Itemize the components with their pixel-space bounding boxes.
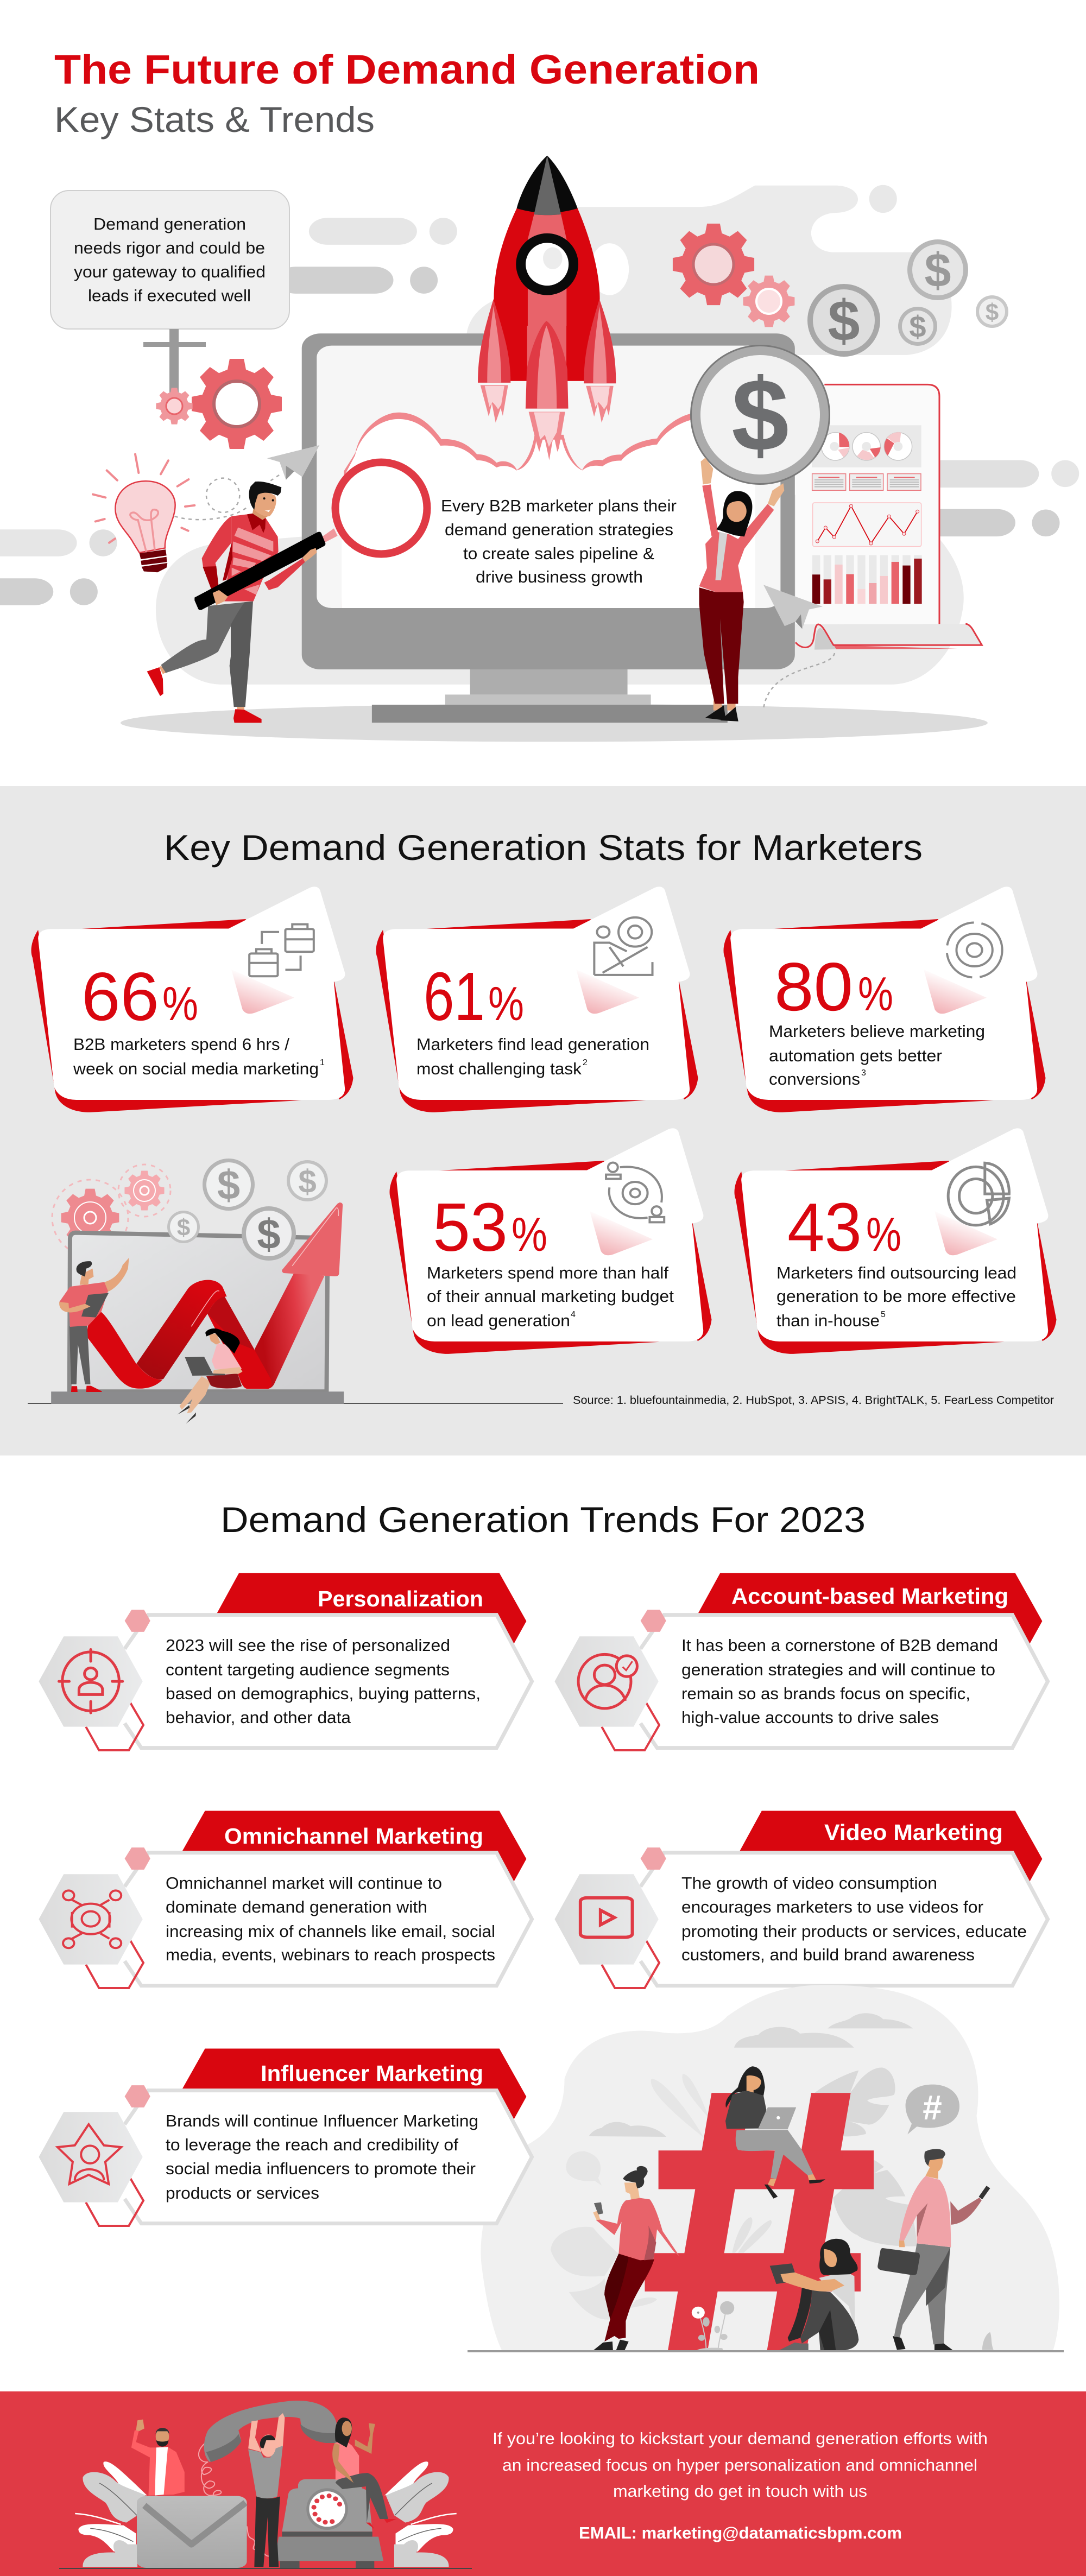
red zigzag arrow <box>87 1202 343 1389</box>
illustration: phone and envelope <box>59 2401 472 2568</box>
stat card: 80%: 80 <box>774 948 853 1025</box>
cta text <box>493 2429 988 2542</box>
trend card: omnichannel marketing: Omnichannel Marketing <box>224 1824 483 1849</box>
center text: Every B2B marketer plans their <box>441 496 677 515</box>
seated woman with laptop <box>178 1328 242 1423</box>
stat card: 43%: 43 <box>787 1189 862 1265</box>
trend card: personalization: based on demographics, buying patterns, <box>166 1684 481 1703</box>
icon: top gears <box>673 224 794 327</box>
trend card: influencer marketing: Brands will continue Influencer Marketing <box>166 2111 478 2130</box>
icon: pink gears <box>52 1164 171 1256</box>
icon: coins: $ <box>177 1214 190 1241</box>
background leaves <box>551 2067 994 2350</box>
trend card: account-based marketing: generation strategies and will continue to <box>681 1660 995 1679</box>
handset <box>204 2401 337 2462</box>
stat card: 61%: Marketers find lead generation <box>416 1035 649 1054</box>
center text: to create sales pipeline & <box>463 544 654 563</box>
trend card: account-based marketing: high-value accounts to drive sales <box>681 1708 939 1727</box>
trend card: omnichannel marketing: increasing mix of channels like email, social <box>166 1922 495 1941</box>
stat card: 80%: % <box>858 967 893 1021</box>
center text: drive business growth <box>476 567 643 586</box>
panel: key stats section <box>0 786 1086 1455</box>
trend card: personalization: behavior, and other data <box>166 1708 351 1727</box>
leaves right <box>384 2461 457 2567</box>
trend card: influencer marketing: to leverage the reach and credibility of <box>166 2135 458 2154</box>
icon: left gears <box>156 359 282 449</box>
cta text: EMAIL: marketing@datamaticsbpm.com <box>579 2523 902 2542</box>
laptop frame <box>51 1233 344 1404</box>
stat card: 61% <box>376 887 698 1112</box>
person: left man <box>131 2420 185 2496</box>
icon: dollar pie chart <box>948 1163 1009 1225</box>
trend card: account-based marketing: Account-based Marketing <box>731 1584 1008 1609</box>
cta text: If you’re looking to kickstart your demand generation efforts with <box>493 2429 988 2448</box>
trend card: account-based marketing <box>554 1573 1048 1750</box>
telephone base <box>275 2479 383 2568</box>
trend card: personalization: 2023 will see the rise of personalized <box>166 1636 450 1655</box>
trend card: video marketing: promoting their products or services, educate <box>681 1922 1027 1941</box>
icon: big dollar coin: $ <box>731 358 789 473</box>
trend card: personalization: content targeting audience segments <box>166 1660 450 1679</box>
man with magnifier <box>147 482 325 723</box>
trend card: personalization: Personalization <box>318 1586 483 1611</box>
trend card: influencer marketing: products or services <box>166 2183 319 2202</box>
illustration: growth arrow with laptop <box>28 1159 1054 1423</box>
stat card: 80%: automation gets better <box>769 1046 942 1065</box>
flower plants <box>692 2301 734 2351</box>
stat card: 43%: 5 <box>881 1310 886 1319</box>
icon: paper planes <box>267 445 835 711</box>
icon: coins: $ <box>909 309 926 344</box>
icon: lightbulb <box>93 454 280 572</box>
trend card: influencer marketing: social media influencers to promote their <box>166 2159 476 2178</box>
illustration: hashtag community <box>468 1985 1064 2352</box>
stat card: 53%: of their annual marketing budget <box>427 1287 674 1306</box>
speech bubble with hash: # <box>923 2088 942 2127</box>
trend card: omnichannel marketing: dominate demand generation with <box>166 1897 427 1916</box>
woman holding coin <box>699 458 784 721</box>
source note: Source: 1. bluefountainmedia, 2. HubSpot, 3. APSIS, 4. BrightTALK, 5. FearLess Competitor <box>573 1394 1054 1407</box>
stat card: 43%: than in-house <box>776 1311 880 1330</box>
telephone cord <box>199 2443 269 2556</box>
panel: trends section <box>39 1499 1064 2352</box>
person: seated woman <box>332 2417 396 2529</box>
stat card: 43%: Marketers find outsourcing lead <box>776 1263 1016 1282</box>
stat card: 53% <box>389 1128 712 1354</box>
icon: coins: $ <box>298 1163 317 1200</box>
center text <box>441 496 677 586</box>
icon: report panel <box>795 384 982 650</box>
subtitle: Key Stats & Trends <box>54 99 375 140</box>
cta text: marketing do get in touch with us <box>613 2482 867 2501</box>
icon: coins <box>167 1159 328 1261</box>
callout box: needs rigor and could be <box>74 238 265 257</box>
trend card: influencer marketing: Influencer Marketing <box>261 2061 483 2086</box>
rocket <box>478 156 616 460</box>
man with tablet <box>59 1258 129 1392</box>
background blob and clouds <box>481 1985 1059 2351</box>
stat card: 61%: % <box>488 977 524 1030</box>
stat card: 80%: Marketers believe marketing <box>769 1022 985 1041</box>
trend card: account-based marketing: It has been a cornerstone of B2B demand <box>681 1636 998 1655</box>
icon: coins: $ <box>217 1162 240 1208</box>
background blobs and pills <box>0 185 1079 742</box>
stat card: 53%: Marketers spend more than half <box>427 1263 668 1282</box>
woman on top with laptop <box>725 2066 825 2199</box>
stat card: 61%: 61 <box>424 958 485 1035</box>
stat card: 53%: 53 <box>433 1189 508 1265</box>
trend card: account-based marketing: remain so as brands focus on specific, <box>681 1684 970 1703</box>
icon: people and gear <box>606 1162 664 1222</box>
title: The Future of Demand Generation <box>54 47 760 93</box>
icon: play button <box>580 1898 633 1937</box>
icon: gear with arrows <box>947 922 1002 978</box>
icon: coins: $ <box>257 1210 281 1258</box>
trend card: video marketing: The growth of video consumption <box>681 1874 937 1893</box>
standing woman with phone <box>593 2166 680 2351</box>
callout box: leads if executed well <box>88 286 251 305</box>
cta text: an increased focus on hyper personalization and omnichannel <box>502 2455 977 2474</box>
callout box <box>50 191 289 329</box>
walking man with bag <box>877 2149 990 2351</box>
stat card: 66%: % <box>162 977 198 1030</box>
trend card: video marketing: Video Marketing <box>824 1820 1003 1845</box>
icon: coins: $ <box>986 299 999 326</box>
magnifying glass <box>322 463 427 554</box>
stat card: 43% <box>734 1128 1057 1354</box>
monitor <box>302 333 795 723</box>
stat card: 66%: 1 <box>320 1058 325 1067</box>
stat card: 66%: B2B marketers spend 6 hrs / <box>73 1035 289 1054</box>
stat card: 53%: 4 <box>571 1310 576 1319</box>
trend card: omnichannel marketing <box>39 1811 532 1988</box>
icon: coins <box>807 239 1008 357</box>
speech bubble with hash <box>906 2085 959 2135</box>
trend card: video marketing <box>554 1811 1048 1988</box>
seated woman with tablet <box>770 2239 858 2351</box>
person: middle man <box>248 2413 285 2567</box>
trend card: personalization <box>39 1573 532 1750</box>
stat card: 53%: % <box>512 1207 547 1261</box>
stat card: 43%: % <box>866 1207 901 1261</box>
center text: demand generation strategies <box>445 520 673 539</box>
stat card: 61%: most challenging task <box>416 1059 582 1078</box>
stat card: 80%: conversions <box>769 1069 860 1088</box>
icon: gear network <box>63 1890 121 1948</box>
section heading: key stats: Key Demand Generation Stats for Marketers <box>164 827 923 868</box>
trend card: video marketing: customers, and build brand awareness <box>681 1945 975 1964</box>
callout box: your gateway to qualified <box>74 262 266 281</box>
leaves left <box>75 2461 147 2567</box>
trend card: influencer marketing <box>39 2048 532 2226</box>
icon: coins: $ <box>828 289 860 353</box>
icon: star person <box>58 2124 121 2184</box>
hashtag symbol <box>645 2093 874 2351</box>
envelope <box>137 2496 247 2568</box>
stat card: 80%: 3 <box>861 1068 866 1078</box>
panel: call to action <box>0 2391 1086 2576</box>
callout box: Demand generation <box>93 214 246 233</box>
trend card: video marketing: encourages marketers to use videos for <box>681 1897 983 1916</box>
stat card: 66%: 66 <box>81 958 159 1035</box>
trend card: omnichannel marketing: media, events, webinars to reach prospects <box>166 1945 495 1964</box>
signpost <box>143 329 206 394</box>
icon: verified user <box>578 1654 637 1708</box>
icon: big dollar coin <box>690 345 830 485</box>
icon: climbing person and gear <box>594 917 653 975</box>
panel: hero section <box>0 47 1079 742</box>
section heading: trends: Demand Generation Trends For 2023 <box>220 1499 866 1540</box>
icon: coins: $ <box>925 243 951 297</box>
icon: briefcases <box>249 925 314 976</box>
trend card: omnichannel marketing: Omnichannel market will continue to <box>166 1874 442 1893</box>
icon: target person <box>59 1649 123 1713</box>
stat card: 80% <box>723 887 1046 1112</box>
stat card: 53%: on lead generation <box>427 1311 570 1330</box>
stat card: 61%: 2 <box>583 1058 588 1067</box>
stat card: 66%: week on social media marketing <box>73 1059 319 1078</box>
ground line <box>468 2350 1064 2352</box>
stat card: 66% <box>31 887 353 1112</box>
stat card: 43%: generation to be more effective <box>776 1287 1016 1306</box>
